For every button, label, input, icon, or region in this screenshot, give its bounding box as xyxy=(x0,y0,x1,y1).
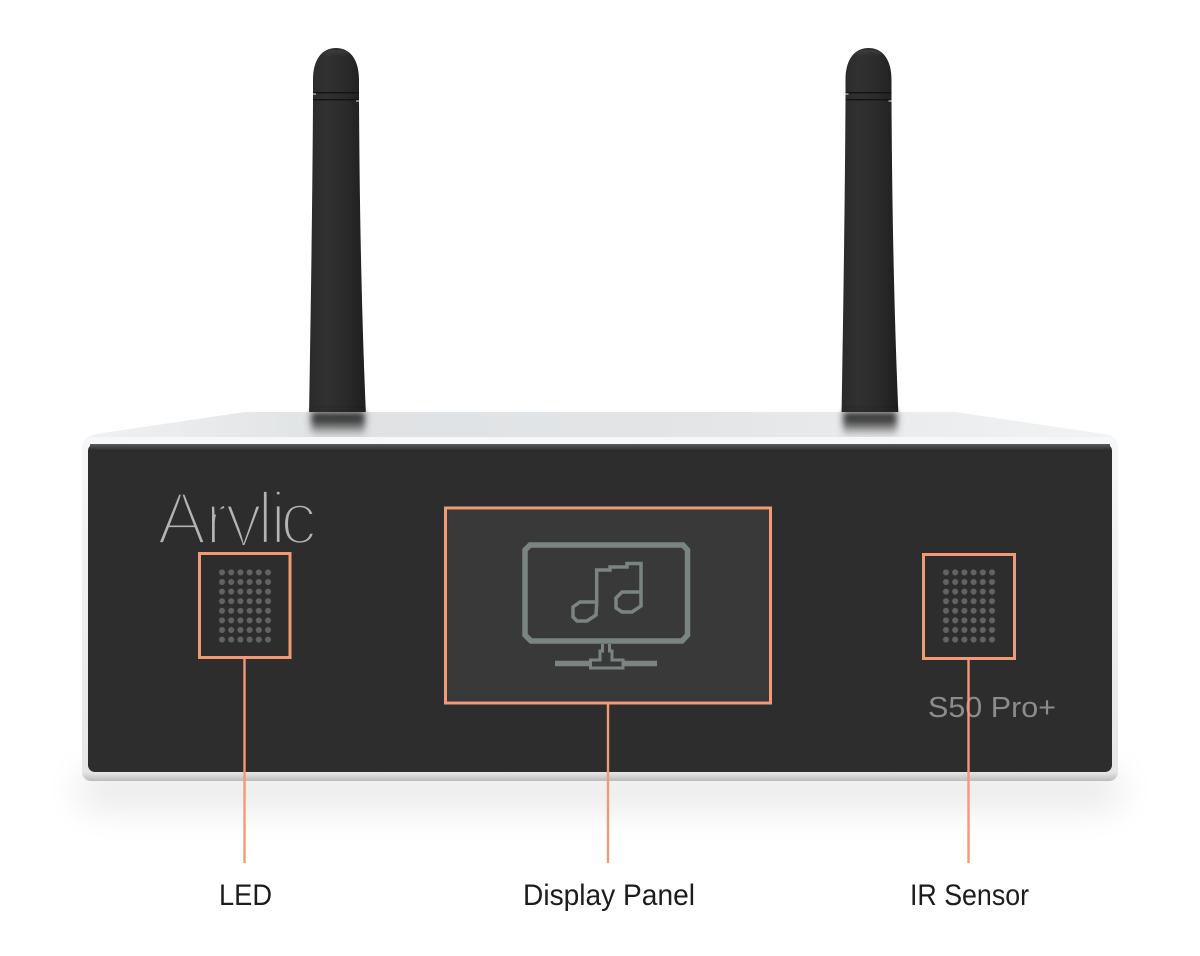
display screen xyxy=(447,510,769,701)
antenna base shadows xyxy=(311,412,897,437)
callout: IR Sensor xyxy=(924,554,1014,863)
monitor outline xyxy=(525,545,688,641)
label: Display Panel: Display Panel xyxy=(523,879,695,912)
antenna: left xyxy=(309,48,366,416)
model name: S50 Pro+: S50 Pro+ xyxy=(928,692,1056,724)
stand base bar xyxy=(555,661,657,666)
black front panel xyxy=(88,444,1112,772)
antenna: right xyxy=(842,48,898,416)
callout: LED xyxy=(200,554,290,863)
label: IR Sensor: IR Sensor xyxy=(910,879,1029,912)
device shadow xyxy=(80,772,1120,808)
callout: Display Panel xyxy=(446,508,770,863)
label: LED: LED xyxy=(219,879,272,912)
top face xyxy=(84,412,1117,450)
music notes xyxy=(573,564,641,621)
LED dot grid xyxy=(217,568,273,644)
silver frame xyxy=(82,437,1118,781)
panel top highlight xyxy=(90,444,1110,450)
device body xyxy=(82,412,1118,781)
IR sensor dot grid xyxy=(941,568,997,644)
logo: Arylic: Arylic xyxy=(157,477,317,560)
monitor stand xyxy=(590,644,623,668)
icon: monitor with music note xyxy=(525,545,688,668)
